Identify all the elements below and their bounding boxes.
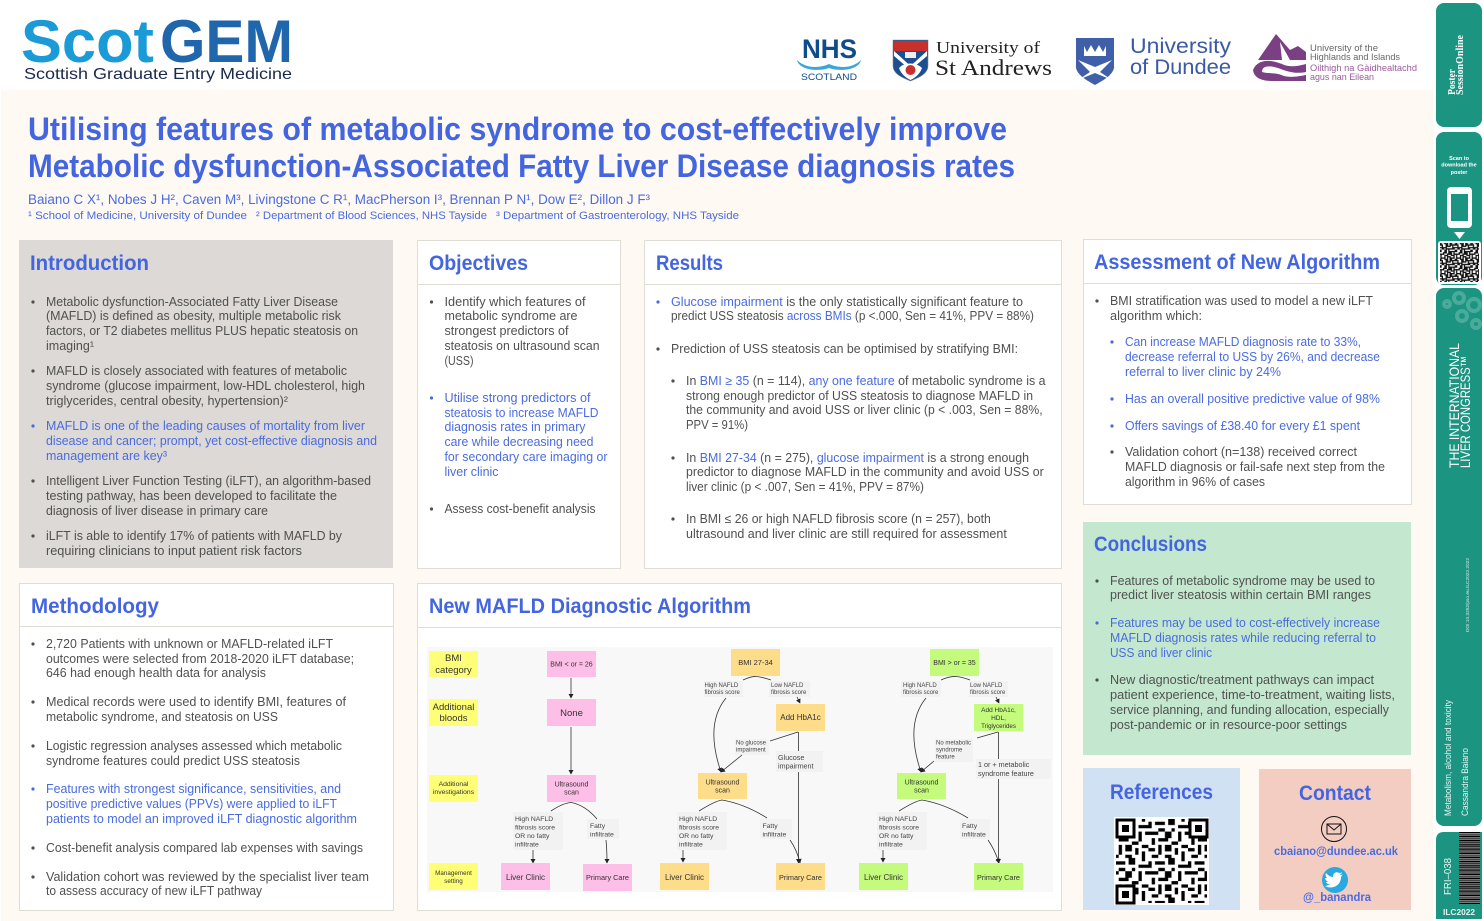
panel: assessment of new algorithm: Can increase MAFLD diagnosis rate to 33%, bbox=[1125, 335, 1361, 349]
column: BMI under 26: BMI < or = 26 bbox=[550, 662, 593, 668]
branch label text: OR no fatty bbox=[679, 833, 714, 840]
logo: University of the Highlands and Islands: agus nan Eilean bbox=[1310, 72, 1374, 83]
heading: objectives: Objectives bbox=[429, 252, 528, 275]
panel: methodology: syndrome features could predict USS steatosis bbox=[46, 754, 300, 768]
sidebar: abstract number and barcode: ILC2022 bbox=[1443, 908, 1476, 917]
panel: methodology: Features with strongest significance, sensitivities, and bbox=[46, 782, 341, 796]
column: BMI 35 or over: Triglycerides bbox=[981, 723, 1016, 730]
sidebar: scan to download: poster bbox=[1451, 170, 1468, 176]
panel: objectives: metabolic syndrome are bbox=[444, 309, 578, 323]
panel: methodology: outcomes were selected from 2018-2020 iLFT database; bbox=[46, 652, 354, 666]
sidebar: congress banner bbox=[1436, 288, 1482, 826]
icon: down arrow bbox=[1454, 232, 1465, 239]
sidebar: scan to download: Scan to bbox=[1449, 156, 1470, 162]
panel: conclusions: New diagnostic/treatment pathways can impact bbox=[1110, 673, 1375, 687]
panel: conclusions bbox=[1083, 522, 1411, 755]
panel: methodology: to assess accuracy of new iLFT pathway bbox=[46, 884, 263, 898]
panel: introduction: MAFLD is one of the leading causes of mortality from liver bbox=[46, 419, 365, 433]
panel: methodology: patients to model an improved iLFT diagnostic algorithm bbox=[46, 812, 357, 826]
panel: objectives: for secondary care imaging or bbox=[444, 450, 608, 464]
logo: NHS Scotland: NHS bbox=[802, 34, 857, 64]
branch label text: fibrosis score bbox=[679, 824, 719, 832]
QR code: references bbox=[1114, 817, 1209, 905]
column: BMI 27-34: Liver Clinic bbox=[665, 873, 704, 882]
heading: methodology: Methodology bbox=[31, 595, 159, 618]
panel: conclusions: patient experience, time-to-treatment, waiting lists, bbox=[1110, 688, 1395, 702]
branch label text: Fatty bbox=[762, 823, 778, 830]
row labels: Additional bbox=[433, 702, 474, 713]
small branch label text: High NAFLD bbox=[903, 683, 937, 689]
twitter handle: @_banandra bbox=[1303, 892, 1372, 904]
panel: methodology: Cost-benefit analysis compared lab expenses with savings bbox=[46, 841, 363, 855]
title: Metabolic dysfunction-Associated Fatty Liver Disease diagnosis rates bbox=[28, 148, 1015, 184]
logo: ScotGEM bbox=[21, 8, 293, 83]
panel: new MAFLD diagnostic algorithm bbox=[418, 584, 1062, 910]
branch label text: High NAFLD bbox=[515, 816, 553, 823]
panel: introduction: Metabolic dysfunction-Associated Fatty Liver Disease bbox=[46, 295, 338, 309]
panel: assessment of new algorithm: Has an overall positive predictive value of 98% bbox=[1125, 392, 1380, 406]
title: Utilising features of metabolic syndrome to cost-effectively improve bbox=[28, 111, 1007, 147]
column: BMI under 26: Ultrasound bbox=[555, 782, 589, 788]
small branch label text: Low NAFLD bbox=[771, 683, 804, 689]
small branch label text: fibrosis score bbox=[903, 690, 939, 696]
column: BMI under 26: Liver Clinic bbox=[506, 873, 545, 882]
panel: methodology: Medical records were used to identify BMI, features of bbox=[46, 695, 347, 709]
branch label text: OR no fatty bbox=[879, 833, 914, 840]
small branch label text: fibrosis score bbox=[970, 690, 1006, 696]
panel: introduction bbox=[19, 240, 393, 568]
row labels: BMI bbox=[445, 653, 462, 664]
row labels: setting bbox=[444, 878, 463, 885]
panel: methodology: metabolic syndrome, and steatosis on USS bbox=[46, 710, 278, 724]
branch label text: infiltrate bbox=[679, 842, 703, 848]
panel: objectives: care while decreasing need bbox=[444, 435, 594, 449]
panel: introduction: factors, or T2 diabetes mellitus PLUS hepatic steatosis on bbox=[46, 324, 358, 338]
column: BMI 27-34: Ultrasound bbox=[706, 780, 740, 786]
panel: conclusions: USS and liver clinic bbox=[1110, 646, 1212, 660]
panel: objectives: Assess cost-benefit analysis bbox=[444, 502, 596, 516]
panel: objectives: (USS) bbox=[444, 354, 474, 368]
column: BMI 27-34 bbox=[660, 649, 825, 890]
logo: ScotGEM: Scot bbox=[21, 8, 154, 75]
branch label text: Fatty bbox=[590, 823, 606, 830]
row labels bbox=[429, 651, 478, 890]
sidebar: congress banner: Cassandra Baiano bbox=[1460, 748, 1470, 816]
panel: introduction: MAFLD is closely associated with features of metabolic bbox=[46, 364, 347, 378]
logo: University of the Highlands and Islands: Highlands and Islands bbox=[1310, 52, 1400, 63]
logo: University of Dundee: of Dundee bbox=[1130, 56, 1231, 79]
logo: University of Dundee: University bbox=[1130, 35, 1232, 58]
panel: introduction: disease and cancer; prompt, yet cost-effective diagnosis and bbox=[46, 434, 377, 448]
panel: objectives: diagnosis rates in primary bbox=[444, 420, 586, 434]
column: BMI under 26 bbox=[501, 651, 632, 891]
email: cbaiano@dundee.ac.uk bbox=[1274, 846, 1399, 858]
panel: results: In BMI 27-34 (n = 275), glucose impairment is a strong enough bbox=[686, 451, 1029, 465]
small branch label text: syndrome bbox=[936, 748, 963, 754]
branch label text: OR no fatty bbox=[515, 833, 550, 840]
panel: introduction: requiring clinicians to input patient risk factors bbox=[46, 544, 302, 558]
panel: results: predictor to diagnose MAFLD in the community and avoid USS or bbox=[686, 465, 1044, 479]
column: BMI 35 or over: Add HbA1c, bbox=[981, 707, 1016, 714]
panel: introduction: diagnosis of liver disease in primary care bbox=[46, 504, 268, 518]
column: BMI 35 or over: Primary Care bbox=[977, 873, 1020, 882]
panel: assessment of new algorithm: Offers savings of £38.40 for every £1 spent bbox=[1125, 419, 1361, 433]
row labels: bloods bbox=[440, 713, 468, 724]
panel: conclusions: service planning, and funding allocation, especially bbox=[1110, 703, 1390, 717]
logo: ScotGEM: Scottish Graduate Entry Medicine bbox=[24, 66, 292, 83]
title bbox=[28, 111, 1015, 184]
column: BMI 35 or over: BMI > or = 35 bbox=[933, 660, 976, 667]
panel: results: ultrasound and liver clinic are still required for assessment bbox=[686, 527, 1007, 541]
panel: results: Glucose impairment is the only statistically significant feature to bbox=[671, 295, 1023, 309]
panel: assessment of new algorithm: Validation cohort (n=138) received correct bbox=[1125, 445, 1358, 459]
heading: algorithm: New MAFLD Diagnostic Algorithm bbox=[429, 595, 751, 618]
panel: results: In BMI ≥ 35 (n = 114), any one feature of metabolic syndrome is a bbox=[686, 374, 1046, 388]
column: BMI 35 or over bbox=[859, 649, 1023, 890]
heading: conclusions: Conclusions bbox=[1094, 533, 1207, 556]
panel: results: predict USS steatosis across BMIs (p <.000, Sen = 41%, PPV = 88%) bbox=[671, 309, 1034, 323]
panel: conclusions: post-pandemic or in resource-poor settings bbox=[1110, 718, 1347, 732]
small branch label text: fibrosis score bbox=[771, 690, 807, 696]
small branch label text: High NAFLD bbox=[704, 683, 739, 689]
affiliations bbox=[28, 210, 739, 222]
panel: methodology: 2,720 Patients with unknown or MAFLD-related iLFT bbox=[46, 637, 333, 651]
panel: introduction: triglycerides, central obesity, hypertension)² bbox=[46, 394, 288, 408]
grey branch labels bbox=[513, 681, 1051, 850]
panel: methodology bbox=[20, 584, 394, 910]
panel: conclusions: Features may be used to cost-effectively increase bbox=[1110, 616, 1380, 630]
sidebar: poster session online: SessionOnline bbox=[1455, 34, 1466, 95]
panel: assessment of new algorithm: referral to liver clinic by 24% bbox=[1125, 365, 1281, 379]
logo: ScotGEM: GEM bbox=[160, 8, 293, 75]
panel: contact bbox=[1259, 769, 1411, 910]
column: BMI 35 or over: HDL, bbox=[991, 715, 1006, 722]
panel: results: the community and avoid USS or liver clinic (p < .003, Sen = 88%, bbox=[686, 403, 1043, 417]
branch label text: Fatty bbox=[962, 823, 978, 830]
branch label text: impairment bbox=[778, 762, 814, 770]
column: BMI 27-34: BMI 27-34 bbox=[738, 658, 773, 667]
row labels: Management bbox=[435, 870, 472, 877]
panel: introduction: iLFT is able to identify 17% of patients with MAFLD by bbox=[46, 529, 343, 543]
branch label text bbox=[515, 753, 1034, 848]
panel: assessment of new algorithm: MAFLD diagnosis or fail-safe next step from the bbox=[1125, 460, 1385, 474]
column: BMI 35 or over: Liver Clinic bbox=[864, 873, 903, 882]
panel: methodology: Validation cohort was reviewed by the specialist liver team bbox=[46, 870, 369, 884]
sidebar: congress banner: DOI:10.3252/pso.eu.ILC2022.2022 bbox=[1465, 557, 1470, 632]
branch label text: fibrosis score bbox=[879, 824, 919, 832]
panel: objectives: steatosis to increase MAFLD bbox=[444, 406, 598, 420]
panel: objectives: Utilise strong predictors of bbox=[444, 391, 591, 405]
panel: introduction: management are key³ bbox=[46, 449, 167, 463]
logo: University of the Highlands and Islands: University of the bbox=[1310, 43, 1378, 54]
heading: references: References bbox=[1110, 781, 1213, 804]
panel: methodology: positive predictive values (PPVs) were applied to iLFT bbox=[46, 797, 337, 811]
panel: results: PPV = 91%) bbox=[686, 418, 748, 432]
logo: NHS Scotland bbox=[797, 34, 861, 83]
panel: introduction: imaging¹ bbox=[46, 339, 94, 353]
panel: introduction: testing pathway, has been developed to facilitate the bbox=[46, 489, 337, 503]
branch label text: Glucose bbox=[778, 753, 804, 762]
sidebar: poster session online bbox=[1436, 3, 1482, 127]
panel: results bbox=[644, 240, 1062, 568]
panel: results: In BMI ≤ 26 or high NAFLD fibrosis score (n = 257), both bbox=[686, 512, 991, 526]
sidebar: abstract number and barcode: FRI–038 bbox=[1443, 858, 1454, 895]
branch label text: infiltrate bbox=[515, 842, 539, 848]
row labels: category bbox=[435, 665, 472, 676]
panel: assessment of new algorithm: BMI stratification was used to model a new iLFT bbox=[1110, 294, 1373, 308]
branch label text: syndrome feature bbox=[978, 769, 1034, 778]
logo: University of St Andrews bbox=[893, 38, 1052, 81]
column: BMI 27-34: Add HbA1c bbox=[780, 713, 821, 722]
heading: assessment: Assessment of New Algorithm bbox=[1094, 251, 1380, 274]
column: BMI under 26: None bbox=[560, 708, 583, 719]
authors: Baiano C X¹, Nobes J H², Caven M³, Livingstone C R¹, MacPherson I³, Brennan P N¹, Dow E², Dillon J F³ bbox=[28, 192, 650, 207]
logo: University of St Andrews: University of bbox=[936, 38, 1040, 57]
heading: introduction: Introduction bbox=[30, 252, 149, 275]
QR code: download bbox=[1438, 241, 1481, 284]
small branch label text: No glucose bbox=[736, 740, 767, 746]
heading: contact: Contact bbox=[1299, 782, 1371, 805]
panel: introduction: Intelligent Liver Function Testing (iLFT), an algorithm-based bbox=[46, 474, 371, 488]
branch label text: High NAFLD bbox=[679, 816, 717, 823]
branch label text: infiltrate bbox=[879, 842, 903, 848]
small branch label text: impairment bbox=[736, 748, 766, 754]
column: BMI 35 or over: scan bbox=[914, 788, 929, 794]
panel: conclusions: MAFLD diagnosis rates while reducing referral to bbox=[1110, 631, 1376, 645]
sidebar: scan to download: download the bbox=[1441, 162, 1477, 168]
panel: conclusions: predict liver steatosis within certain BMI ranges bbox=[1110, 588, 1371, 602]
branch label text: fibrosis score bbox=[515, 824, 555, 832]
small branch label text: feature bbox=[936, 754, 955, 760]
branch label text: infiltrate bbox=[962, 832, 986, 838]
logo: University of the Highlands and Islands: Oilthigh na Gàidhealtachd bbox=[1310, 63, 1417, 74]
small branch label text: No metabolic bbox=[936, 740, 971, 746]
sidebar: congress banner: LIVER CONGRESS™ bbox=[1458, 356, 1473, 468]
icon: phone bbox=[1447, 187, 1472, 228]
logo: University of the Highlands and Islands bbox=[1253, 34, 1417, 83]
sidebar: congress banner: Metabolism, alcohol and toxicity bbox=[1443, 700, 1453, 816]
column: BMI 35 or over: Ultrasound bbox=[905, 780, 939, 786]
logo: University of St Andrews: St Andrews bbox=[935, 55, 1052, 80]
sidebar: scan to download bbox=[1436, 132, 1482, 285]
panel: references bbox=[1083, 768, 1240, 910]
small branch label text bbox=[704, 683, 1006, 760]
logo: NHS Scotland: SCOTLAND bbox=[801, 72, 857, 83]
panel: introduction: syndrome (glucose impairment, low-HDL cholesterol, high bbox=[46, 379, 365, 393]
branch label text: 1 or + metabolic bbox=[978, 760, 1030, 769]
sidebar: congress banner: THE INTERNATIONAL bbox=[1447, 343, 1462, 468]
column: BMI 27-34: Primary Care bbox=[779, 873, 822, 882]
arrows bbox=[533, 676, 999, 863]
panel: methodology: 646 had enough health data for analysis bbox=[46, 666, 266, 680]
affiliations: ³ Department of Gastroenterology, NHS Tayside bbox=[496, 210, 739, 222]
panel: methodology: Logistic regression analyses assessed which metabolic bbox=[46, 739, 342, 753]
panel: results: strong enough predictor of USS steatosis to diagnose MAFLD in bbox=[686, 389, 1033, 403]
branch label text: infiltrate bbox=[762, 832, 787, 838]
panel: objectives bbox=[418, 240, 620, 568]
branch label text: infiltrate bbox=[590, 832, 614, 838]
row labels: Additional bbox=[439, 781, 469, 788]
flowchart bbox=[427, 647, 1053, 892]
panel: results: Prediction of USS steatosis can be optimised by stratifying BMI: bbox=[671, 342, 1018, 356]
logo: University of Dundee bbox=[1076, 35, 1232, 85]
column: BMI under 26: Primary Care bbox=[586, 873, 629, 882]
small branch label text: fibrosis score bbox=[704, 690, 741, 696]
panel: conclusions: Features of metabolic syndrome may be used to bbox=[1110, 574, 1375, 588]
panel: assessment of new algorithm: algorithm in 96% of cases bbox=[1125, 475, 1265, 489]
panel: objectives: liver clinic bbox=[444, 465, 498, 479]
affiliations: ² Department of Blood Sciences, NHS Tayside bbox=[256, 210, 487, 222]
panel: results: liver clinic (p < .007, Sen = 41%, PPV = 87%) bbox=[686, 480, 924, 494]
panel: introduction: (MAFLD) is defined as obesity, multiple metabolic risk bbox=[46, 309, 342, 323]
icon: envelope bbox=[1322, 816, 1346, 842]
sidebar: poster session online: Poster bbox=[1447, 68, 1458, 95]
icon: twitter bbox=[1322, 867, 1348, 893]
column: BMI 27-34: scan bbox=[715, 788, 730, 794]
row labels: investigations bbox=[433, 789, 475, 796]
affiliations: ¹ School of Medicine, University of Dundee bbox=[28, 210, 247, 222]
panel: assessment of new algorithm: decrease referral to USS by 26%, and decrease bbox=[1125, 350, 1380, 364]
panel: assessment of new algorithm: algorithm which: bbox=[1110, 309, 1202, 323]
heading: results: Results bbox=[656, 252, 723, 275]
panel: objectives: steatosis on ultrasound scan bbox=[444, 339, 600, 353]
column: BMI under 26: scan bbox=[564, 790, 579, 796]
panel: objectives: strongest predictors of bbox=[444, 324, 569, 338]
sidebar: abstract number and barcode bbox=[1436, 832, 1482, 919]
panel: assessment of new algorithm bbox=[1084, 240, 1412, 504]
branch label text: High NAFLD bbox=[879, 816, 917, 823]
small branch label text: Low NAFLD bbox=[970, 683, 1003, 689]
panel: objectives: Identify which features of bbox=[444, 295, 586, 309]
